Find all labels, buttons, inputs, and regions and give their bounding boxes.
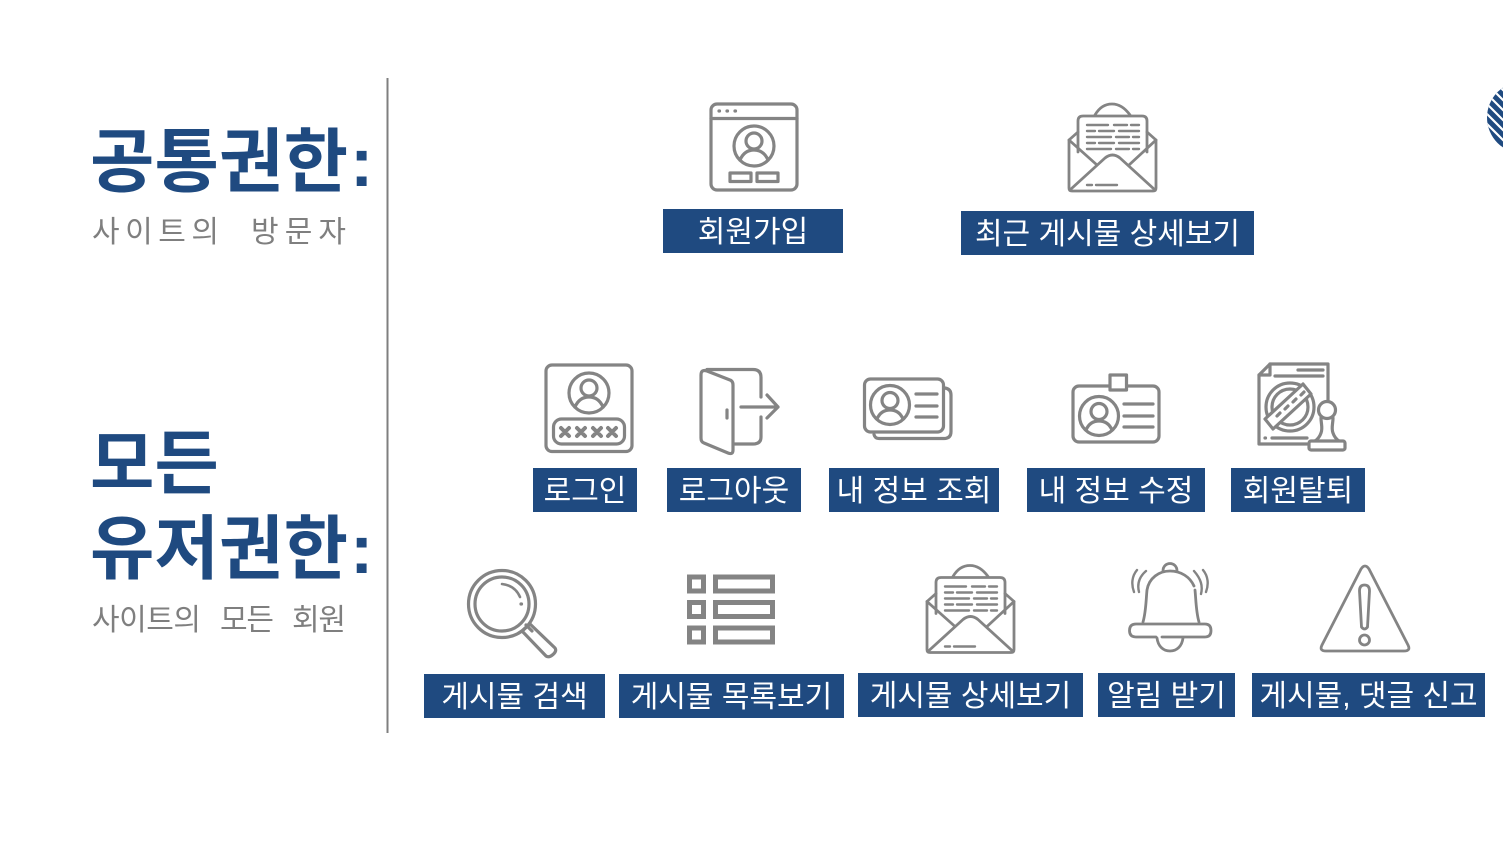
label: receive notifications: 알림 받기 xyxy=(1107,680,1226,713)
heading: user permissions: 유저권한 xyxy=(90,510,348,588)
decorative striped circle xyxy=(1487,88,1503,148)
label: view my info: 내 정보 조회 xyxy=(837,475,991,508)
label: recent post detail xyxy=(961,211,1254,255)
icon: open envelope xyxy=(1069,104,1156,191)
label: post detail: 게시물 상세보기 xyxy=(870,680,1071,713)
label: post detail xyxy=(858,673,1083,717)
icon: warning triangle xyxy=(1321,566,1409,651)
heading: all users: 모든 xyxy=(90,425,219,503)
icon: stamped document xyxy=(1259,364,1345,450)
label: signup xyxy=(663,209,843,253)
label: search posts xyxy=(424,674,605,718)
label: logout xyxy=(667,468,801,512)
vertical divider xyxy=(386,78,388,733)
icon: id badge xyxy=(1073,375,1159,442)
label: view my info xyxy=(829,468,999,512)
label: post list: 게시물 목록보기 xyxy=(631,681,832,714)
subtitle: all site members: 회원 xyxy=(292,604,346,637)
heading: user permissions: : xyxy=(350,510,373,588)
subtitle: site visitors: 방문자 xyxy=(251,216,346,249)
label: withdraw membership: 회원탈퇴 xyxy=(1243,475,1353,508)
label: edit my info: 내 정보 수정 xyxy=(1039,475,1193,508)
icon: profile cards xyxy=(864,379,951,438)
icon: logout door xyxy=(701,370,778,454)
label: logout: 로그아웃 xyxy=(679,475,789,508)
subtitle: all site members: 모든 xyxy=(220,604,274,637)
heading: common permissions: : xyxy=(350,123,373,201)
icon: open envelope 2 xyxy=(927,566,1014,652)
label: receive notifications xyxy=(1098,673,1235,717)
label: post list xyxy=(619,674,844,718)
icon: login card xyxy=(546,365,632,452)
label: edit my info xyxy=(1027,468,1205,512)
label: search posts: 게시물 검색 xyxy=(441,681,588,714)
label: recent post detail: 최근 게시물 상세보기 xyxy=(975,218,1240,251)
subtitle: all site members: 사이트의 xyxy=(92,604,201,637)
label: withdraw membership xyxy=(1231,468,1365,512)
label: login: 로그인 xyxy=(544,475,626,508)
subtitle: site visitors xyxy=(92,216,346,249)
label: login xyxy=(533,468,637,512)
icon: signup window xyxy=(711,104,797,190)
icon: magnifying glass xyxy=(468,570,556,657)
subtitle: all site members xyxy=(92,604,346,637)
heading: common permissions: 공통권한 xyxy=(90,123,348,201)
label: report posts and comments: 게시물, 댓글 신고 xyxy=(1259,680,1478,713)
icon: ringing bell xyxy=(1130,564,1211,651)
subtitle: site visitors: 사이트의 xyxy=(92,216,219,249)
icon: list view xyxy=(690,577,772,642)
label: signup: 회원가입 xyxy=(698,216,808,249)
